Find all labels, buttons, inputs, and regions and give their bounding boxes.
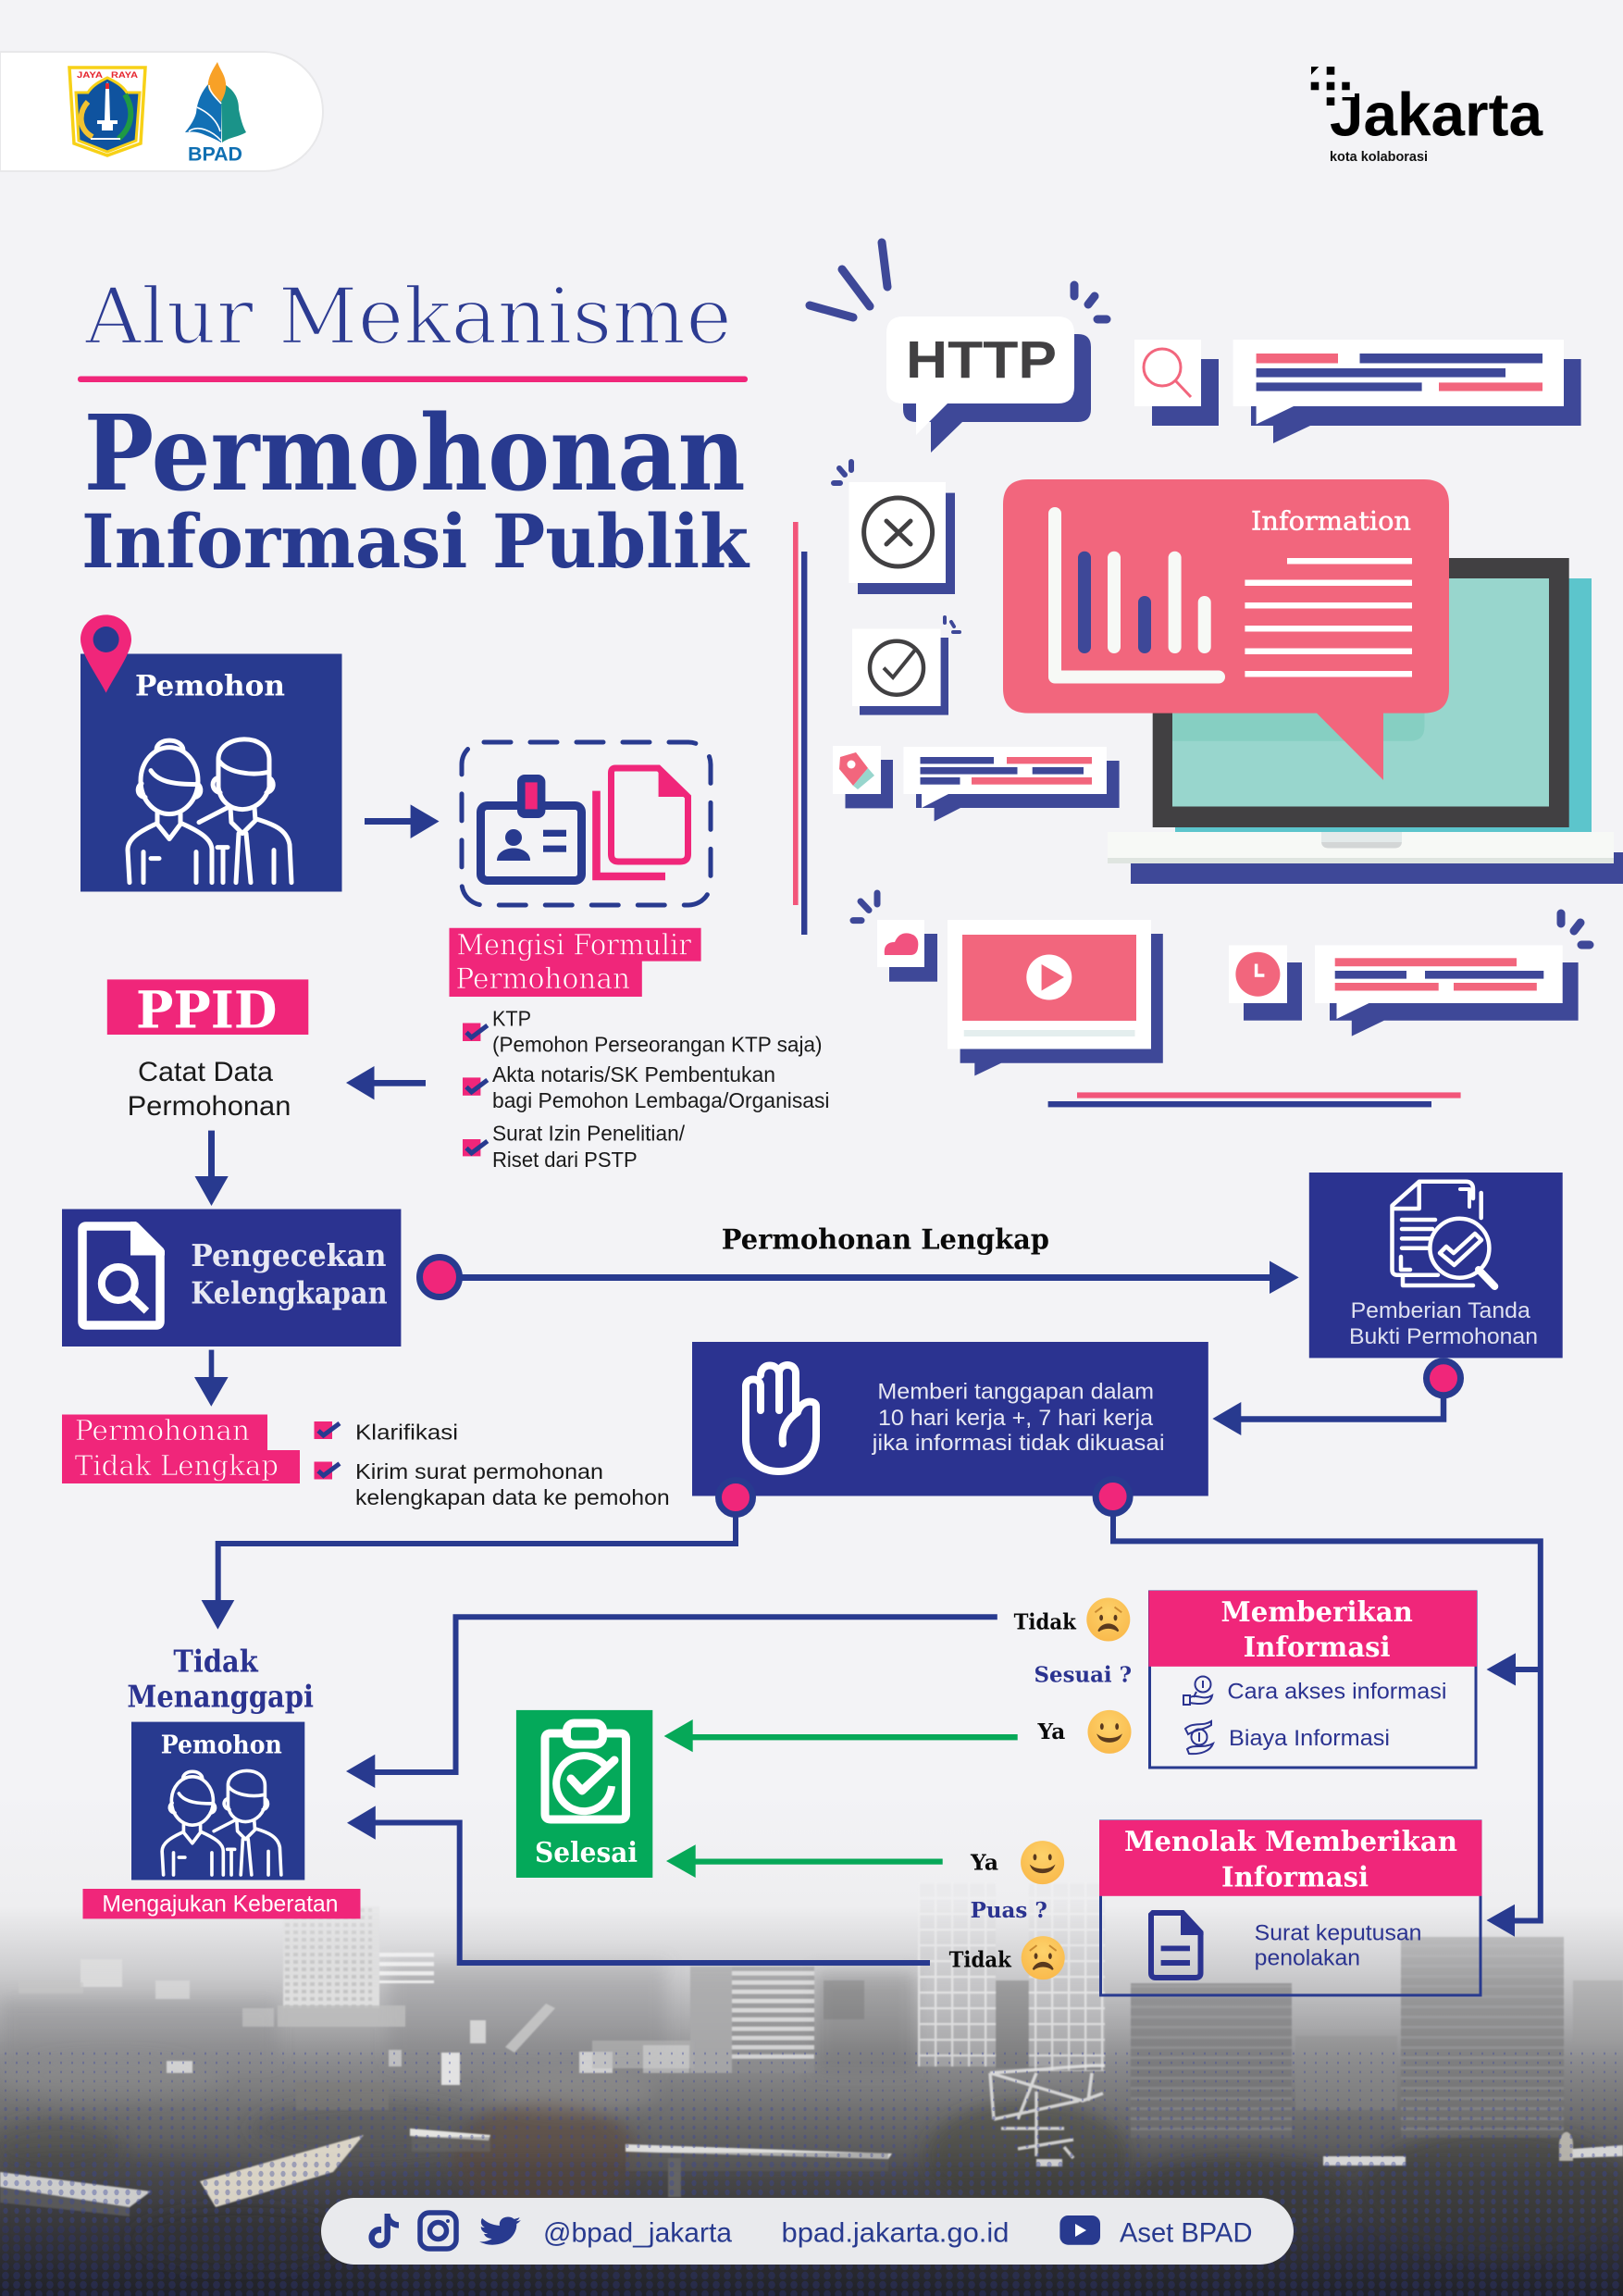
title	[78, 271, 750, 585]
panel: Pemohon	[81, 614, 342, 892]
label: Mengisi Formulir Permohonan	[450, 928, 701, 997]
heading: Memberikan Informasi: Memberikan	[1221, 1596, 1413, 1629]
illustration: HTTP speech bubble	[886, 316, 1091, 453]
text: Pemberian Tanda Bukti Permohonan: Pemberian Tanda	[1351, 1298, 1530, 1323]
label: Mengajukan Keberatan: Mengajukan Keberatan	[102, 1892, 339, 1917]
illustration: rays near HTTP	[810, 242, 1107, 319]
label: PPID: PPID	[136, 979, 278, 1040]
text lines	[1245, 558, 1412, 677]
text: Permohonan Lengkap: Permohonan Lengkap	[722, 1223, 1049, 1257]
panel: Menolak Memberikan Informasi: penolakan	[1255, 1945, 1360, 1971]
icon: TikTok	[368, 2214, 399, 2248]
panel: Pengecekan Kelengkapan: Kelengkapan	[191, 1275, 388, 1311]
text: Pengecekan Kelengkapan: Pengecekan	[191, 1237, 387, 1273]
item: Surat Izin: Surat Izin Penelitian/	[492, 1122, 686, 1146]
illustration: search card	[1134, 340, 1219, 426]
panel: form icons with dashed frame	[462, 742, 711, 905]
icon: people	[128, 739, 291, 883]
icon: location pin	[81, 614, 131, 693]
icon: document search	[82, 1222, 165, 1325]
illustration: heart card	[853, 893, 937, 982]
illustration: laptop	[1108, 558, 1623, 884]
icon: hand with info	[1183, 1677, 1212, 1705]
text: @bpad_jakarta: @bpad_jakarta	[543, 2218, 732, 2249]
label: Mengisi Formulir Permohonan: Permohonan	[455, 962, 630, 996]
illustration: text bubble top right	[1233, 340, 1581, 443]
arrow: Ya sesuai to Selesai	[664, 1719, 1018, 1752]
text: Memberi tanggapan: Memberi tanggapan dalam	[877, 1380, 1154, 1405]
arrow: Bukti to tanggapan	[1212, 1361, 1460, 1435]
item: Akta	[463, 1062, 829, 1112]
central striped tower	[690, 1967, 732, 2073]
decision: Puas	[949, 1841, 1065, 1980]
panel: Selesai	[516, 1710, 652, 1878]
icon: hands with coin	[1185, 1721, 1213, 1754]
text: Biaya Informasi: Biaya Informasi	[1229, 1726, 1390, 1751]
panel: Menolak Memberikan Informasi: Informasi	[1221, 1861, 1369, 1893]
arrow: Ya puas to Selesai	[666, 1844, 943, 1878]
item: Klarifikasi: Klarifikasi	[355, 1420, 458, 1444]
icon: BPAD leaf logo: BPAD	[188, 144, 242, 165]
text: bpad.jakarta.go.id: bpad.jakarta.go.id	[781, 2218, 1009, 2249]
logo: Jakarta kota kolaborasi: Jakarta	[1330, 81, 1543, 149]
icon: stop hand	[746, 1365, 816, 1471]
billboards	[441, 2053, 460, 2085]
icon: Instagram	[420, 2213, 456, 2249]
icon: clipboard check	[545, 1723, 626, 1819]
icon: happy face	[1021, 1841, 1064, 1884]
arrow: Permohonan Lengkap	[420, 1257, 1299, 1297]
illustration: tag card and bubble	[833, 746, 1120, 822]
text: Catat Data Permohonan: Permohonan	[128, 1091, 291, 1122]
icon: documents	[596, 765, 691, 876]
icon: document review	[1392, 1182, 1494, 1286]
icon: ID card	[481, 775, 581, 881]
logo pill: Jakarta emblem and BPAD	[0, 52, 323, 171]
item: KTP: (Pemohon Perseorangan KTP saja)	[492, 1033, 822, 1057]
illustration: information speech bubble	[1003, 479, 1449, 780]
illustration: X card	[834, 462, 955, 594]
label: Permohonan Tidak Lengkap: Permohonan	[75, 1415, 250, 1447]
arrow: Tidak puas to Pemohon	[347, 1806, 930, 1963]
arrow: tanggapan to Tidak Menanggapi	[202, 1481, 753, 1630]
logo: Jakarta kota kolaborasi	[1311, 67, 1543, 165]
text: Tidak: Tidak	[1014, 1610, 1077, 1634]
icon: rejection document	[1151, 1910, 1204, 1978]
icon: Jakarta coat of arms: RAYA	[111, 70, 139, 80]
item: KTP	[463, 1006, 822, 1057]
heading: Information: Information	[1251, 505, 1411, 536]
icon: happy face	[1087, 1710, 1132, 1754]
panel: Pemberian Tanda Bukti Permohonan	[1309, 1173, 1563, 1358]
bar chart	[1084, 558, 1205, 647]
panel: Memberi tanggapan	[692, 1342, 1208, 1496]
text: Tidak Menanggapi	[127, 1644, 314, 1714]
item: Kirim surat	[315, 1459, 670, 1509]
panel: Memberi tanggapan: 10 hari kerja +, 7 hari kerja	[878, 1406, 1154, 1431]
icon: sad face	[1086, 1597, 1130, 1642]
text: Aset BPAD: Aset BPAD	[1120, 2218, 1253, 2249]
illustration: HTTP speech bubble: HTTP	[906, 330, 1057, 390]
heading: Menolak Memberikan Informasi: Menolak Memberikan	[1124, 1826, 1457, 1858]
icon: BPAD leaf logo	[185, 62, 246, 165]
arrow: tanggapan to information outcomes	[1096, 1479, 1541, 1937]
item: Klarifikasi	[315, 1420, 458, 1444]
panel: Memberikan Informasi: Informasi	[1244, 1632, 1391, 1664]
arrow: PPID to Pengecekan	[194, 1131, 229, 1206]
arrow: Tidak sesuai to Pemohon	[346, 1617, 997, 1788]
checklist: documents required	[463, 1006, 829, 1172]
icon: people	[162, 1770, 281, 1875]
arrow: Pemohon to form	[365, 804, 440, 838]
title line: Informasi Publik: Informasi Publik	[81, 498, 750, 585]
panel: Pemohon small	[131, 1722, 304, 1880]
arrow: Pengecekan to tidak lengkap	[194, 1350, 229, 1407]
item: Surat Izin: Riset dari PSTP	[492, 1148, 638, 1172]
dot screen overlay	[0, 2049, 1623, 2296]
mid buildings	[296, 2099, 389, 2110]
dark towers right	[1131, 1983, 1292, 2138]
small buildings left	[81, 1959, 122, 1987]
item: Akta: bagi Pemohon Lembaga/Organisasi	[492, 1088, 829, 1112]
item: Akta: Akta notaris/SK Pembentukan	[492, 1062, 775, 1086]
white grid tower	[918, 1997, 996, 2067]
text: Surat keputusan penolakan: Surat keputusan	[1255, 1921, 1421, 1946]
illustration: video card	[948, 920, 1163, 1075]
item: Kirim surat: kelengkapan data ke pemohon	[355, 1485, 670, 1509]
illustration: vertical accent lines	[793, 522, 807, 935]
logo: Jakarta kota kolaborasi: kota kolaborasi	[1330, 149, 1428, 165]
heading: Pemohon: Pemohon	[161, 1731, 282, 1759]
text: Ya: Ya	[970, 1851, 998, 1875]
text: Tidak Menanggapi: Menanggapi	[127, 1678, 314, 1714]
chart axes	[1055, 514, 1219, 677]
label: Permohonan Tidak Lengkap: Tidak Lengkap	[75, 1450, 279, 1483]
panel: Pemberian Tanda Bukti Permohonan: Bukti Permohonan	[1349, 1324, 1538, 1349]
label: Mengisi Formulir Permohonan: Mengisi Formulir	[457, 928, 691, 962]
elevated roads	[0, 2128, 1623, 2216]
text: Cara akses informasi: Cara akses informasi	[1227, 1680, 1447, 1705]
icon: Twitter	[479, 2217, 521, 2245]
panel: Memberi tanggapan: jika informasi tidak dikuasai	[872, 1431, 1165, 1456]
illustration: bottom accent lines	[1048, 1092, 1461, 1107]
panel: Memberikan Informasi	[1148, 1591, 1477, 1768]
text: Ya: Ya	[1036, 1719, 1065, 1744]
illustration: clock card	[1229, 945, 1302, 1021]
title line: Alur Mekanisme: Alur Mekanisme	[84, 271, 732, 362]
tree tops	[0, 2151, 1623, 2296]
haze masses	[0, 1960, 1623, 2198]
text: Tidak: Tidak	[949, 1947, 1012, 1973]
item: Kirim surat: Kirim surat permohonan	[355, 1459, 603, 1483]
text: Tidak Menanggapi: Tidak	[173, 1644, 259, 1679]
decision: Sesuai	[1014, 1597, 1132, 1754]
text: Puas ?: Puas ?	[971, 1898, 1047, 1923]
illustration: text bubble lower right	[1315, 913, 1590, 1036]
illustration: check card	[852, 617, 960, 715]
title line: Permohonan: Permohonan	[84, 393, 746, 515]
item: Surat Izin	[463, 1122, 686, 1172]
city skyline background photo	[0, 1881, 1623, 2296]
icon: Jakarta coat of arms	[69, 68, 145, 155]
panel: Menolak Memberikan Informasi	[1099, 1820, 1481, 1995]
icon: Jakarta coat of arms: JAYA	[77, 70, 104, 80]
arrow: documents to PPID	[346, 1066, 426, 1099]
text: Selesai: Selesai	[535, 1837, 638, 1869]
text: Sesuai ?: Sesuai ?	[1035, 1663, 1132, 1688]
item: KTP: KTP	[492, 1006, 531, 1030]
crane frame	[990, 2066, 1105, 2158]
text: Catat Data Permohonan	[128, 1057, 291, 1122]
heading: Pemohon: Pemohon	[135, 670, 285, 703]
checklist: tidak lengkap actions	[315, 1420, 670, 1509]
icon: sad face	[1022, 1936, 1065, 1980]
panel: Pengecekan Kelengkapan	[62, 1209, 401, 1347]
icon: YouTube	[1059, 2215, 1100, 2245]
label: Permohonan Tidak Lengkap	[62, 1414, 300, 1483]
text: Catat Data Permohonan: Catat Data	[138, 1057, 273, 1087]
light tower left	[283, 1950, 379, 2006]
footer pill: social links	[321, 2198, 1294, 2265]
